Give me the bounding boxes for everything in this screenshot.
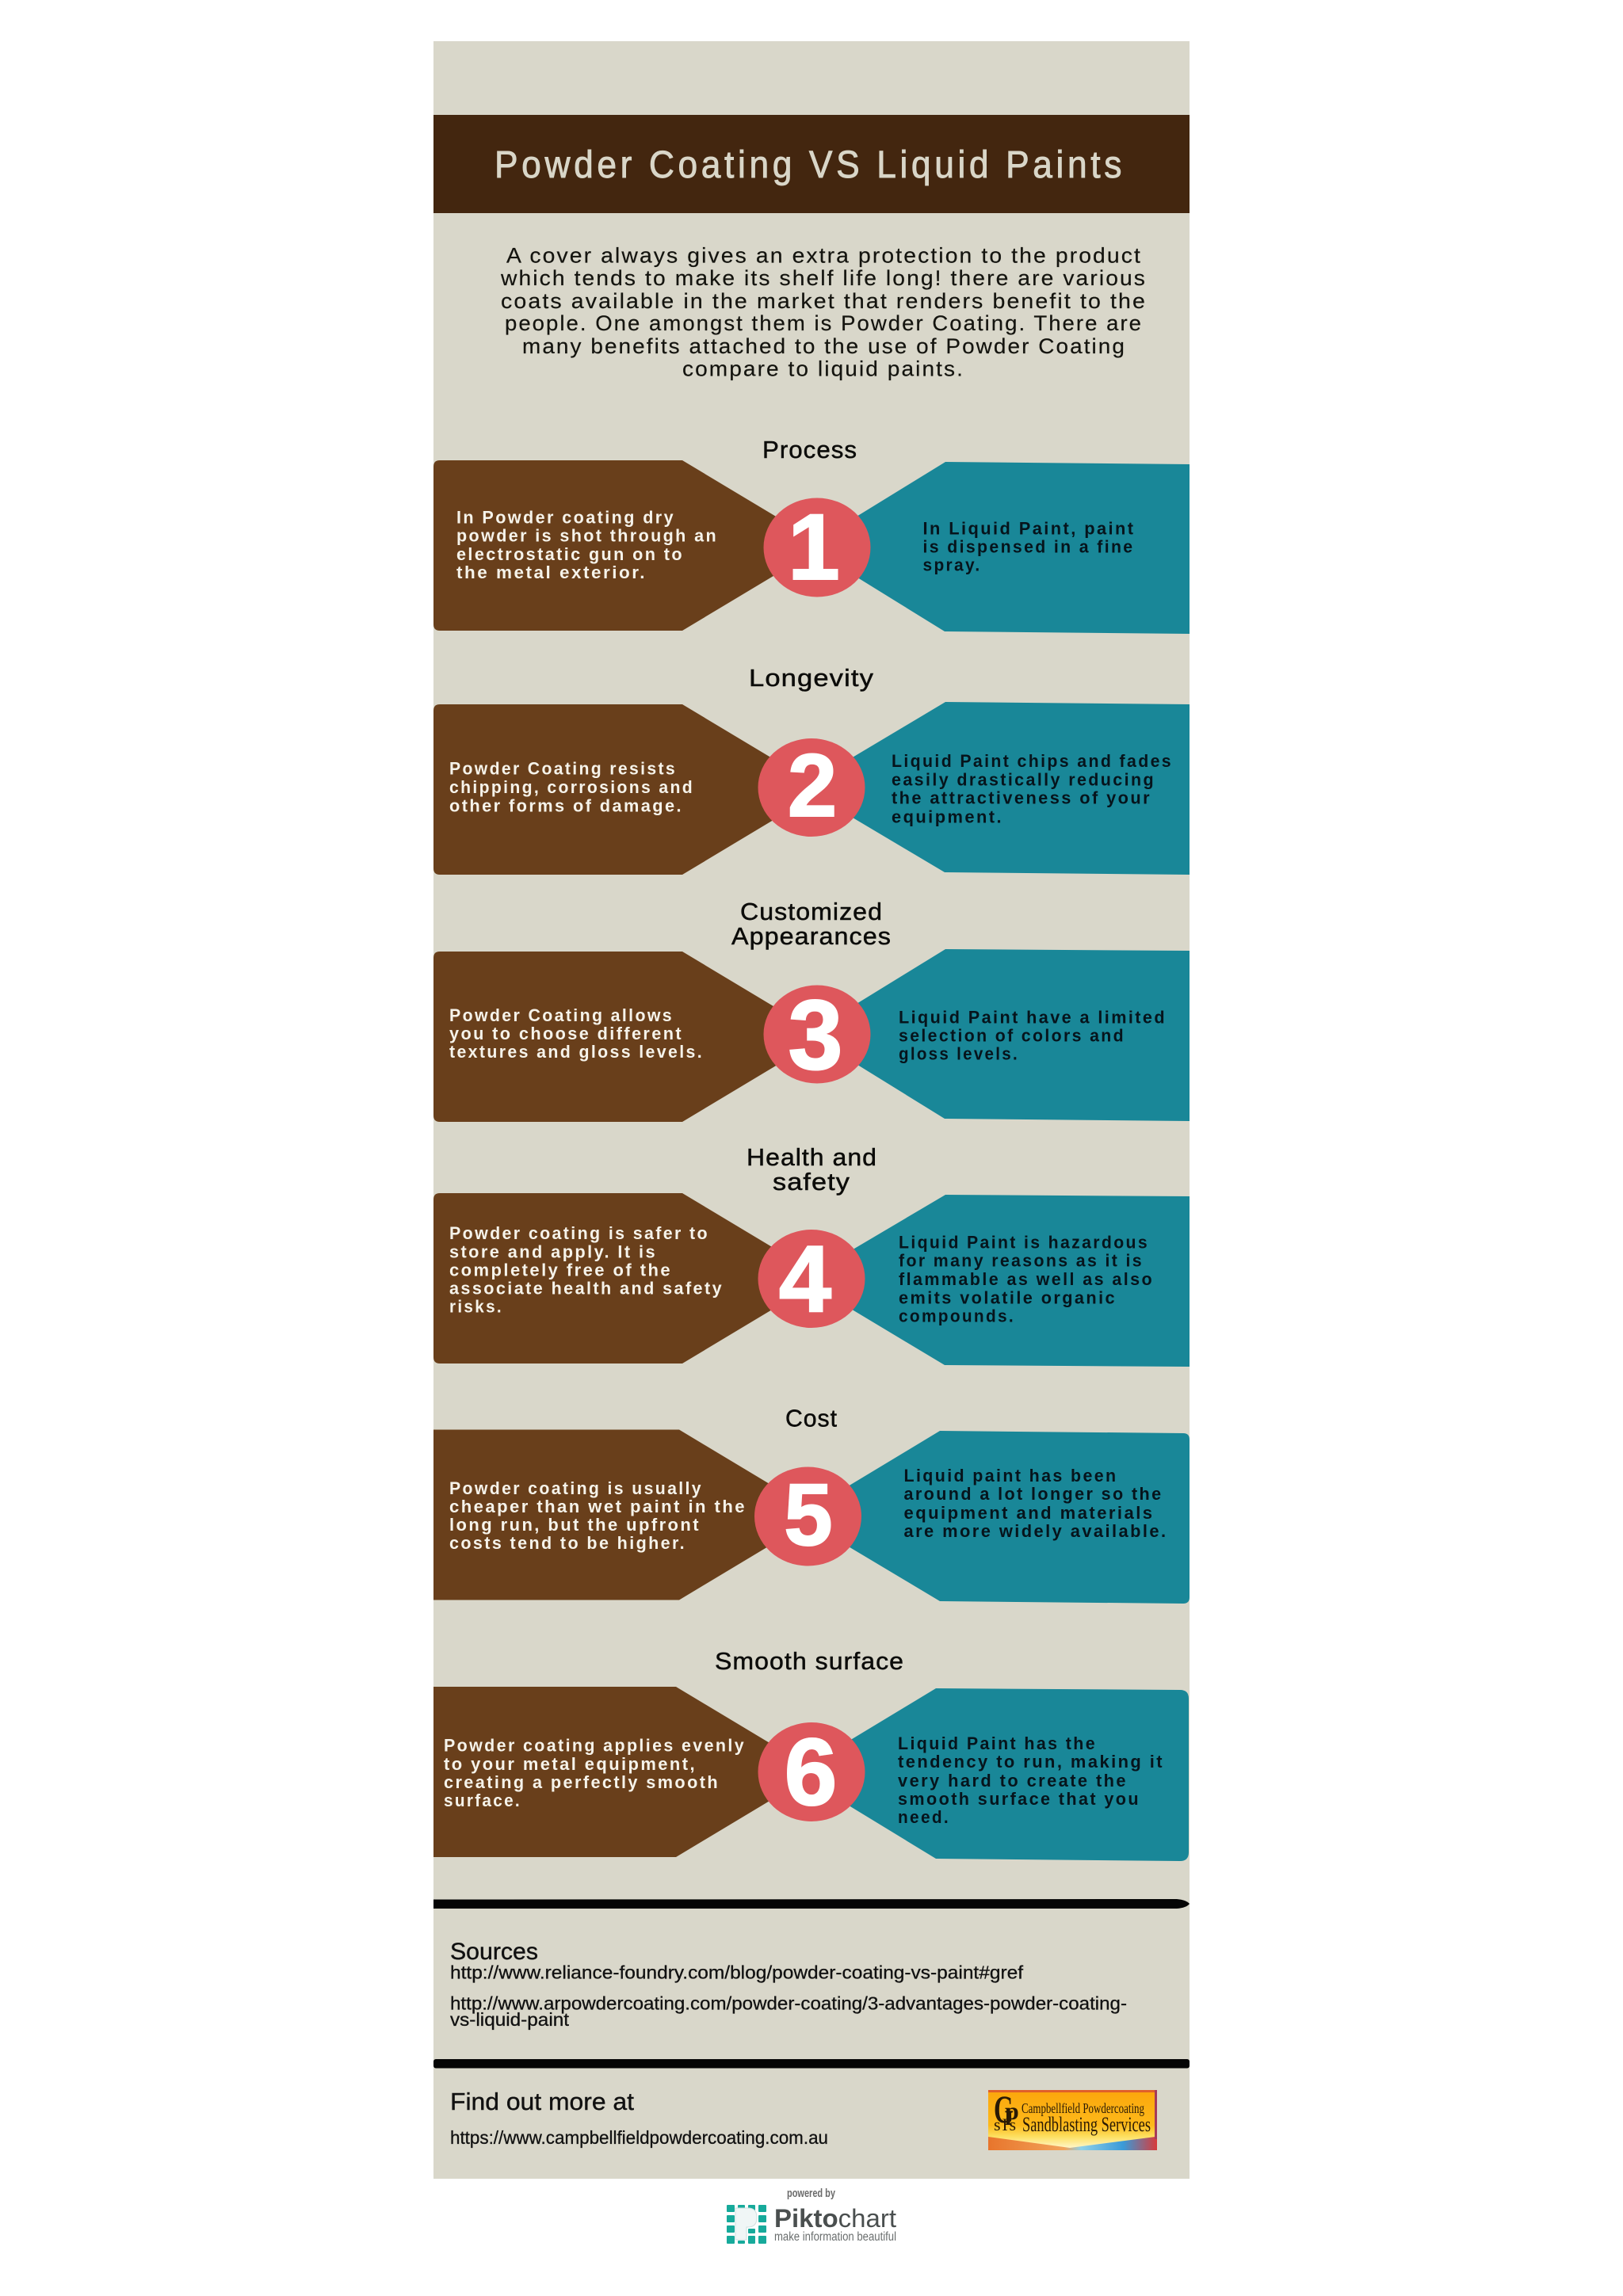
number badge 6: [758, 1719, 865, 1825]
liquid text 5: Liquid paint has been: [903, 1466, 1117, 1486]
heading: health and safety: safety: [773, 1168, 850, 1196]
powder text 5: cheaper than wet paint in the: [449, 1497, 747, 1516]
intro text: [500, 244, 1147, 380]
company logo: Campbellfield Powdercoating: [1022, 2100, 1144, 2116]
sources block: http://www.reliance-foundry.com/blog/powder-coating-vs-paint#gref: [450, 1962, 1024, 1982]
section 3: customized appearances: [433, 898, 1190, 1122]
icon: piktochart logo mark: [727, 2205, 766, 2244]
heading: longevity: Longevity: [749, 664, 874, 692]
powered by label: powered by: [787, 2187, 835, 2200]
brown panel 5: [433, 1429, 821, 1600]
powder text 5: Powder coating is usually: [449, 1478, 703, 1498]
liquid text 4: compounds.: [899, 1306, 1015, 1326]
liquid text 6: tendency to run, making it: [898, 1752, 1164, 1772]
teal panel 3: [808, 949, 1190, 1121]
piktochart wordmark: Piktochart: [774, 2204, 896, 2233]
find out more block: Find out more at: [450, 2088, 634, 2115]
powder text 2: [449, 759, 694, 816]
divider bar bottom: [433, 2059, 1190, 2068]
powder text 6: Powder coating applies evenly: [444, 1735, 746, 1756]
powder text 4: associate health and safety: [449, 1279, 724, 1298]
powder text 1: powder is shot through an: [456, 526, 718, 545]
powder text 6: [444, 1735, 746, 1810]
find out more block: [450, 2088, 828, 2148]
divider bar top: [433, 1899, 1190, 1909]
section 2: longevity: [433, 664, 1190, 875]
number badge 1: 1: [788, 495, 840, 600]
liquid text 6: very hard to create the: [898, 1771, 1128, 1791]
powder text 2: other forms of damage.: [449, 795, 683, 816]
powder text 6: to your metal equipment,: [444, 1754, 697, 1774]
number badge 3: [764, 981, 870, 1090]
intro text: coats available in the market that renders benefit to the: [501, 289, 1147, 313]
liquid text 4: Liquid Paint is hazardous: [899, 1233, 1149, 1252]
heading: customized appearances: Appearances: [731, 922, 892, 950]
teal panel 5: [798, 1431, 1190, 1604]
powder text 4: completely free of the: [449, 1260, 672, 1280]
brown panel 6: [433, 1687, 818, 1857]
number badge 3: 3: [789, 981, 842, 1090]
number badge 5: [754, 1466, 861, 1566]
liquid text 3: [899, 1008, 1167, 1063]
section 5: cost: [433, 1404, 1190, 1604]
liquid text 5: around a lot longer so the: [903, 1484, 1163, 1504]
powder text 1: the metal exterior.: [456, 563, 647, 582]
background panel: [433, 41, 1190, 2179]
company logo: G: [994, 2087, 1014, 2131]
powder text 4: risks.: [449, 1296, 503, 1317]
liquid text 4: flammable as well as also: [899, 1269, 1154, 1289]
powder text 5: costs tend to be higher.: [449, 1533, 686, 1553]
number badge 2: [758, 736, 865, 837]
piktochart tagline: make information beautiful: [774, 2230, 896, 2244]
teal panel 2: [802, 702, 1190, 875]
powder text 3: [449, 1005, 704, 1062]
number badge 4: [758, 1226, 865, 1332]
powder text 5: long run, but the upfront: [449, 1515, 701, 1535]
teal panel 1: [808, 462, 1190, 634]
number badge 2: 2: [788, 736, 837, 835]
heading: process: Process: [762, 436, 857, 463]
heading: customized appearances: [731, 898, 892, 950]
liquid text 1: is dispensed in a fine: [922, 537, 1135, 556]
company logo: p: [1005, 2096, 1019, 2125]
liquid text 1: In Liquid Paint, paint: [922, 518, 1135, 539]
heading: health and safety: [747, 1143, 877, 1196]
liquid text 4: [899, 1233, 1154, 1326]
sources block: Sources: [450, 1939, 538, 1965]
liquid text 6: [898, 1733, 1164, 1827]
brown panel 2: [433, 704, 824, 875]
intro text: A cover always gives an extra protection to the product: [506, 244, 1142, 268]
powder text 4: Powder coating is safer to: [449, 1223, 709, 1243]
company logo: sIs: [994, 2115, 1016, 2134]
powder text 1: electrostatic gun on to: [456, 544, 684, 564]
liquid text 5: are more widely available.: [903, 1521, 1168, 1541]
powder text 3: Powder Coating allows: [449, 1005, 674, 1025]
liquid text 6: need.: [898, 1807, 950, 1827]
title banner: [433, 115, 1190, 213]
sources block: [450, 1939, 1127, 2030]
powder text 3: textures and gloss levels.: [449, 1042, 704, 1062]
section 4: health and safety: [433, 1143, 1190, 1367]
company logo: Sandblasting Services: [1022, 2113, 1151, 2136]
section 1: process: [433, 436, 1190, 634]
powder text 6: creating a perfectly smooth: [444, 1772, 720, 1792]
liquid text 5: equipment and materials: [903, 1503, 1154, 1523]
brown panel 1: [433, 460, 824, 631]
liquid text 3: selection of colors and: [899, 1025, 1125, 1046]
number badge 4: 4: [779, 1226, 831, 1332]
section 6: smooth surface: [433, 1647, 1189, 1861]
company logo: [988, 2087, 1157, 2150]
brown panel 3: [433, 952, 824, 1122]
powder text 4: [449, 1223, 724, 1317]
intro text: many benefits attached to the use of Powder Coating: [522, 334, 1126, 358]
liquid text 2: equipment.: [892, 807, 1003, 827]
powder text 4: store and apply. It is: [449, 1242, 657, 1261]
liquid text 5: [903, 1466, 1168, 1541]
heading: health and safety: Health and: [747, 1143, 877, 1171]
powder text 2: Powder Coating resists: [449, 759, 677, 778]
teal panel 4: [802, 1195, 1190, 1367]
teal panel 6: [796, 1688, 1189, 1861]
title banner: Powder Coating VS Liquid Paints: [495, 144, 1125, 186]
liquid text 3: gloss levels.: [899, 1044, 1019, 1063]
powder text 5: [449, 1478, 747, 1553]
powder text 2: chipping, corrosions and: [449, 777, 694, 797]
heading: cost: Cost: [785, 1404, 838, 1432]
number badge 5: 5: [784, 1466, 833, 1564]
sources block: vs-liquid-paint: [450, 2009, 570, 2030]
liquid text 2: easily drastically reducing: [892, 770, 1155, 789]
powder text 1: [456, 507, 718, 582]
powder text 1: In Powder coating dry: [456, 507, 675, 528]
liquid text 1: spray.: [922, 555, 981, 575]
intro text: which tends to make its shelf life long! there are various: [500, 266, 1147, 290]
intro text: compare to liquid paints.: [682, 357, 964, 380]
liquid text 1: [922, 518, 1135, 575]
liquid text 2: the attractiveness of your: [892, 788, 1151, 808]
brown panel 4: [433, 1193, 824, 1363]
liquid text 4: emits volatile organic: [899, 1288, 1117, 1307]
number badge 6: 6: [785, 1719, 837, 1825]
liquid text 2: Liquid Paint chips and fades: [892, 751, 1173, 771]
find out more block: https://www.campbellfieldpowdercoating.com.au: [450, 2127, 828, 2148]
liquid text 6: Liquid Paint has the: [898, 1733, 1097, 1753]
intro text: people. One amongst them is Powder Coating. There are: [505, 311, 1143, 335]
heading: customized appearances: Customized: [740, 898, 883, 925]
liquid text 2: [892, 751, 1173, 827]
heading: smooth surface: Smooth surface: [715, 1647, 904, 1675]
liquid text 6: smooth surface that you: [898, 1789, 1140, 1809]
powder text 6: surface.: [444, 1791, 521, 1810]
liquid text 4: for many reasons as it is: [899, 1250, 1144, 1271]
liquid text 3: Liquid Paint have a limited: [899, 1008, 1167, 1027]
powder text 3: you to choose different: [449, 1024, 683, 1043]
sources block: http://www.arpowdercoating.com/powder-coating/3-advantages-powder-coating-: [450, 1993, 1127, 2014]
number badge 1: [764, 495, 870, 600]
